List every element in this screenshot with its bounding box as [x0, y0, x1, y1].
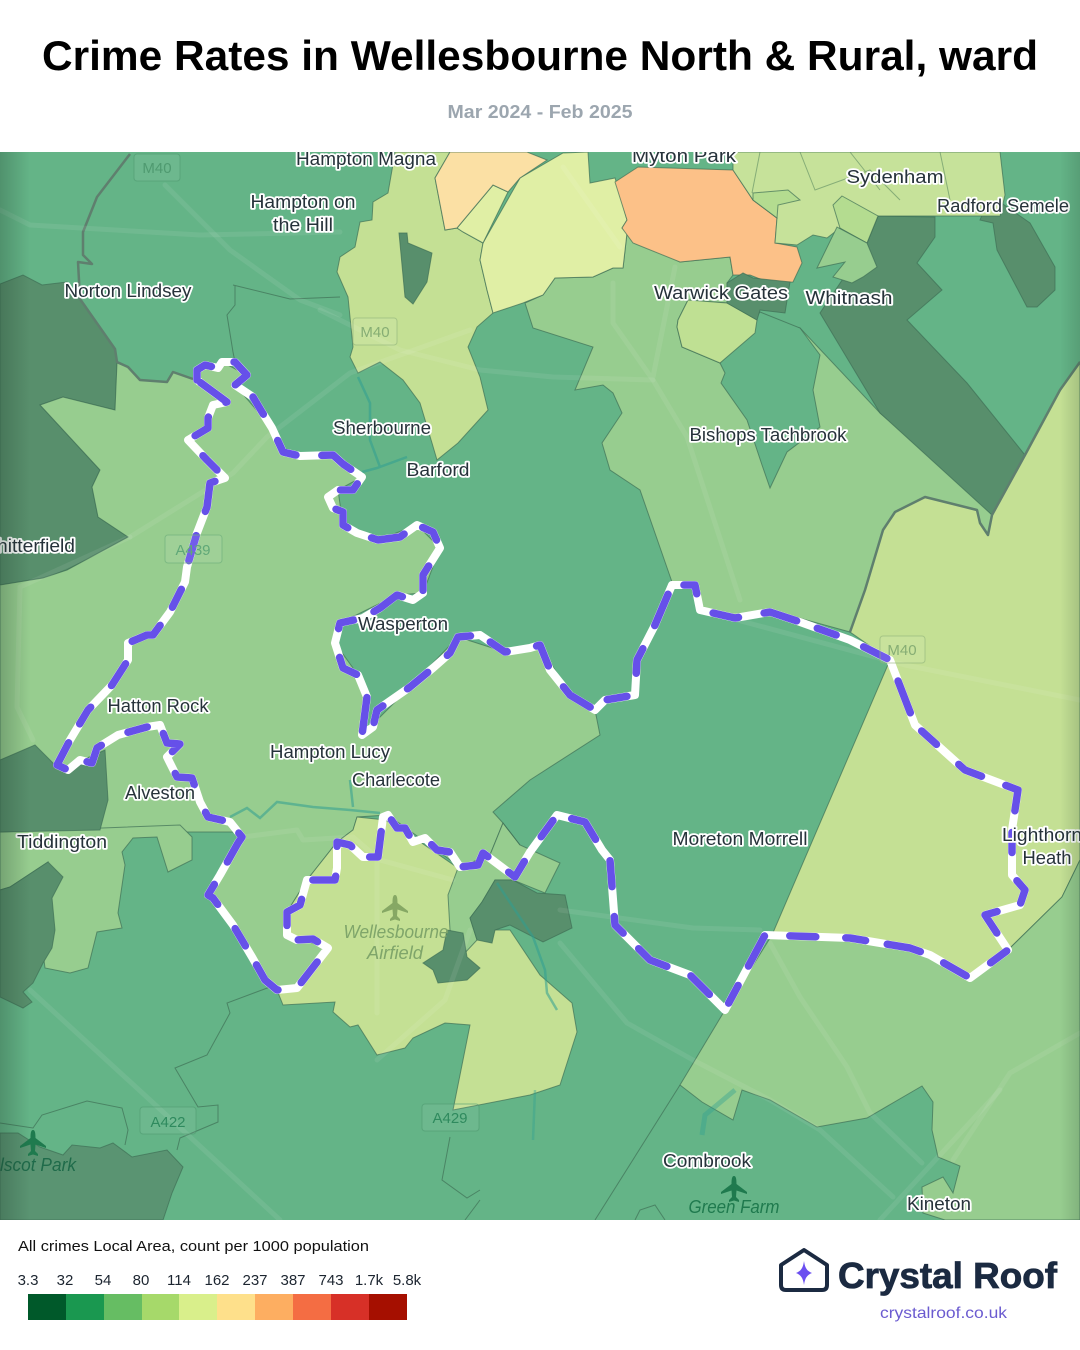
place labels: Wellesbourne — [344, 922, 448, 942]
region: Wellesbourne airfield yellow-green — [277, 817, 577, 1110]
place labels: Myton Park — [632, 146, 737, 166]
rivers — [230, 377, 735, 1140]
ward boundary: Wellesbourne North and Rural — [57, 362, 1025, 1010]
place labels — [0, 146, 1080, 1217]
road shield: M40 east: M40 — [887, 642, 917, 659]
region: orange highest-crime area — [615, 167, 802, 283]
place labels: Hampton Magna — [296, 149, 437, 169]
icon: house with star — [781, 1250, 827, 1290]
region: Wellesbourne light pieces — [448, 823, 560, 955]
place labels: Norton Lindsey — [64, 281, 192, 301]
subtitle: date range: Mar 2024 - Feb 2025 — [448, 101, 632, 122]
region: Tachbrook mid-green insert — [720, 312, 820, 488]
place labels: Heath — [1022, 848, 1072, 868]
region: south-east light green — [680, 860, 1080, 1220]
legend scale values: 32 — [57, 1272, 73, 1289]
region: south-west dark patches — [0, 745, 108, 832]
legend colour ramp — [28, 1294, 407, 1320]
legend scale values: 54 — [95, 1272, 111, 1289]
place labels: Wasperton — [358, 614, 448, 634]
road shield: A439: A439 — [175, 542, 211, 559]
road shield: M40 north — [134, 154, 180, 181]
place labels: lscot Park — [0, 1155, 77, 1175]
legend scale values: 3.3 — [18, 1272, 38, 1289]
place labels: Sydenham — [846, 167, 944, 187]
icon: airfield plane — [382, 895, 408, 921]
region: Scot Park dark area — [0, 1133, 183, 1220]
region: Tiddington strip — [0, 825, 192, 973]
legend title: All crimes Local Area, count per 1000 population — [18, 1238, 369, 1255]
legend scale values: 237 — [242, 1272, 268, 1289]
region: M40 corridor dark — [820, 216, 1025, 515]
place labels: Hampton Lucy — [270, 742, 390, 762]
region: Radford Semele dark blob — [980, 195, 1055, 307]
place labels: Whitnash — [806, 288, 892, 308]
thick grey boundaries — [78, 154, 1080, 632]
region: peach wedge — [435, 152, 547, 230]
region: Warwick town pieces — [677, 152, 1005, 363]
place labels: Kineton — [907, 1194, 971, 1214]
road shield: M40 east — [880, 636, 925, 663]
legend scale values: 743 — [318, 1272, 344, 1289]
legend scale values: 80 — [133, 1272, 149, 1289]
place labels: Green Farm — [688, 1197, 780, 1217]
legend scale values: 1.7k — [355, 1272, 384, 1289]
place labels: Sherbourne — [333, 418, 431, 438]
place labels: Airfield — [366, 943, 424, 963]
place labels: Radford Semele — [937, 196, 1069, 216]
legend scale values: 162 — [204, 1272, 230, 1289]
region: north-west dark area — [0, 275, 128, 585]
road shield: A422: A422 — [150, 1114, 186, 1131]
legend scale values: 5.8k — [393, 1272, 422, 1289]
region: Bishops Tachbrook light green — [525, 233, 992, 632]
place labels: Barford — [406, 460, 470, 480]
road shield: A422 — [140, 1107, 196, 1134]
icon: Scot Park plane — [20, 1130, 46, 1156]
legend scale values: 114 — [167, 1272, 191, 1289]
legend scale values — [18, 1272, 422, 1289]
place labels: Warwick Gates — [654, 283, 788, 303]
region: ward west light green — [0, 362, 600, 990]
place labels: Combrook — [663, 1151, 752, 1171]
region: pale yellow wedges — [457, 152, 627, 313]
region: Wellesbourne dark patches — [423, 880, 572, 983]
legend scale values: 387 — [280, 1272, 306, 1289]
icon: Green Farm plane — [721, 1176, 747, 1202]
road shield: A439 — [165, 535, 222, 563]
choropleth map — [0, 146, 1080, 1220]
place labels: Moreton Morrell — [672, 829, 808, 849]
road shield: M40 central — [353, 318, 397, 345]
logo wordmark: Crystal Roof — [838, 1255, 1058, 1296]
logo url: crystalroof.co.uk — [880, 1305, 1008, 1322]
region: east yellow-green — [772, 362, 1080, 978]
place labels: Hatton Rock — [108, 696, 210, 716]
place labels: Bishops Tachbrook — [690, 425, 848, 445]
place labels: Lighthorn — [1002, 825, 1080, 845]
logo: Crystal Roof — [781, 1250, 1058, 1322]
road shield: M40 central: M40 — [360, 324, 390, 341]
road shield: M40 north: M40 — [142, 160, 172, 177]
region: Hampton yellow-green block — [337, 152, 493, 460]
place labels: Alveston — [125, 783, 195, 803]
thin boundaries — [0, 285, 680, 1220]
road shield: A429 — [422, 1104, 479, 1131]
place labels: Tiddington — [17, 832, 107, 852]
place labels: Charlecote — [352, 770, 440, 790]
road shield: A429: A429 — [432, 1110, 468, 1127]
place labels: the Hill — [273, 215, 333, 235]
title: Crime Rates in Wellesbourne North & Rural, ward — [42, 32, 1038, 79]
roads — [0, 167, 1080, 1220]
place labels: Hampton on — [250, 192, 356, 212]
region: Hampton dark patch — [399, 233, 432, 304]
